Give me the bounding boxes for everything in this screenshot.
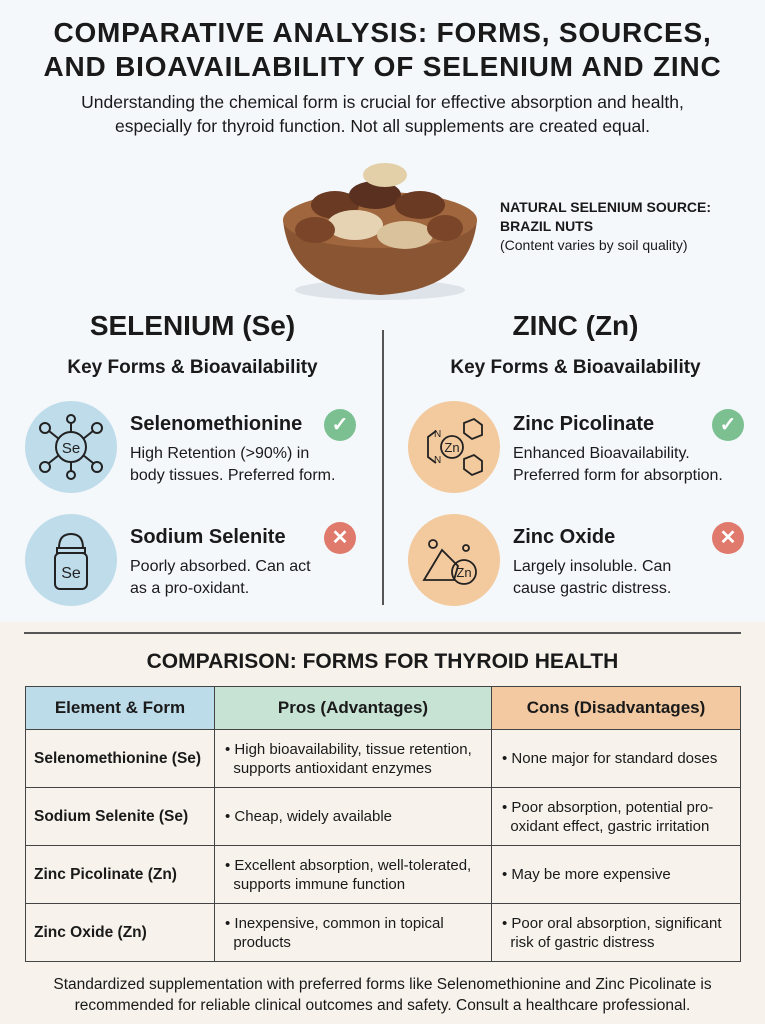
title: COMPARATIVE ANALYSIS: FORMS, SOURCES, [53, 17, 712, 48]
comparison table: products [233, 934, 291, 950]
comparison table: • High bioavailability, tissue retention, [225, 740, 472, 758]
item: sodium selenite: Sodium Selenite [130, 526, 286, 548]
icon: cross [712, 522, 744, 554]
title [43, 17, 722, 82]
icon: molecule: Se [62, 440, 80, 457]
item: zinc picolinate: Preferred form for absorption. [513, 467, 723, 484]
item: selenomethionine: body tissues. Preferred form. [130, 467, 335, 484]
icon: check: ✓ [332, 414, 348, 436]
divider horizontal [24, 632, 741, 634]
comparison table: oxidant effect, gastric irritation [510, 818, 709, 834]
brazil nut label: (Content varies by soil quality) [500, 237, 688, 253]
icon: check [324, 409, 356, 441]
icon: check [712, 409, 744, 441]
brazil nut label [500, 199, 711, 253]
icon: powder [408, 514, 500, 606]
comparison table: • Inexpensive, common in topical [225, 914, 444, 932]
comparison table: • May be more expensive [502, 866, 671, 883]
title: AND BIOAVAILABILITY OF SELENIUM AND ZINC [43, 51, 722, 82]
comparison table: Zinc Picolinate (Zn) [34, 866, 177, 883]
comparison table: Pros (Advantages) [278, 698, 428, 717]
item: zinc oxide: Zinc Oxide [513, 526, 615, 548]
panel: zinc [408, 310, 744, 606]
item: zinc oxide [408, 514, 744, 606]
comparison table: • Poor absorption, potential pro- [502, 798, 713, 816]
subheading: Key Forms & Bioavailability [450, 357, 701, 378]
footer note: recommended for reliable clinical outcomes and safety. Consult a healthcare professional. [75, 997, 690, 1014]
item: sodium selenite: Poorly absorbed. Can act [130, 558, 311, 575]
item: selenomethionine [25, 401, 356, 493]
icon: salt shaker [25, 514, 117, 606]
comparison table: supports immune function [233, 876, 405, 892]
panel: selenium [25, 310, 356, 606]
subtitle [81, 92, 684, 136]
heading: selenium: SELENIUM (Se) [90, 310, 295, 341]
table heading: COMPARISON: FORMS FOR THYROID HEALTH [147, 650, 618, 673]
comparison table: Element & Form [55, 698, 185, 717]
icon: cross: ✕ [720, 527, 736, 549]
divider vertical [382, 330, 384, 605]
icon: salt shaker: Se [61, 565, 81, 582]
comparison table: • Excellent absorption, well-tolerated, [225, 856, 471, 874]
brazil nut label: BRAZIL NUTS [500, 218, 593, 234]
item: sodium selenite [25, 514, 356, 606]
comparison table [25, 686, 741, 962]
item: zinc oxide: Largely insoluble. Can [513, 558, 671, 575]
item: sodium selenite: as a pro-oxidant. [130, 580, 249, 597]
icon: molecule [25, 401, 117, 493]
heading: zinc: ZINC (Zn) [513, 310, 638, 341]
comparison table: Sodium Selenite (Se) [34, 808, 188, 825]
comparison table: risk of gastric distress [510, 934, 655, 950]
subtitle: especially for thyroid function. Not all supplements are created equal. [115, 116, 650, 136]
subheading: Key Forms & Bioavailability [67, 357, 318, 378]
icon: bowl of brazil nuts [283, 163, 477, 300]
icon: check: ✓ [720, 414, 736, 436]
icon: picolinate structure: N [434, 455, 441, 466]
icon: picolinate structure: Zn [444, 440, 460, 455]
footer note: Standardized supplementation with preferred forms like Selenomethionine and Zinc Picolinate is [53, 976, 712, 993]
comparison table: supports antioxidant enzymes [233, 760, 432, 776]
item: zinc picolinate: Enhanced Bioavailability. [513, 445, 690, 462]
comparison table: Selenomethionine (Se) [34, 750, 201, 767]
comparison table: • Cheap, widely available [225, 808, 392, 825]
brazil nut label: NATURAL SELENIUM SOURCE: [500, 199, 711, 215]
subtitle: Understanding the chemical form is crucial for effective absorption and health, [81, 92, 684, 112]
comparison table: Zinc Oxide (Zn) [34, 924, 147, 941]
cream background bottom [0, 622, 765, 1024]
item: zinc picolinate [408, 401, 744, 493]
icon: picolinate structure [408, 401, 500, 493]
comparison table: • Poor oral absorption, significant [502, 914, 722, 932]
icon: picolinate structure: N [434, 429, 441, 440]
icon: powder: Zn [456, 565, 472, 580]
comparison table: • None major for standard doses [502, 750, 717, 767]
item: selenomethionine: High Retention (>90%) in [130, 445, 309, 462]
item: zinc oxide: cause gastric distress. [513, 580, 671, 597]
comparison table: Cons (Disadvantages) [527, 698, 705, 717]
icon: cross: ✕ [332, 527, 348, 549]
icon: cross [324, 522, 356, 554]
item: selenomethionine: Selenomethionine [130, 413, 302, 435]
item: zinc picolinate: Zinc Picolinate [513, 413, 654, 435]
footer note [53, 976, 712, 1014]
